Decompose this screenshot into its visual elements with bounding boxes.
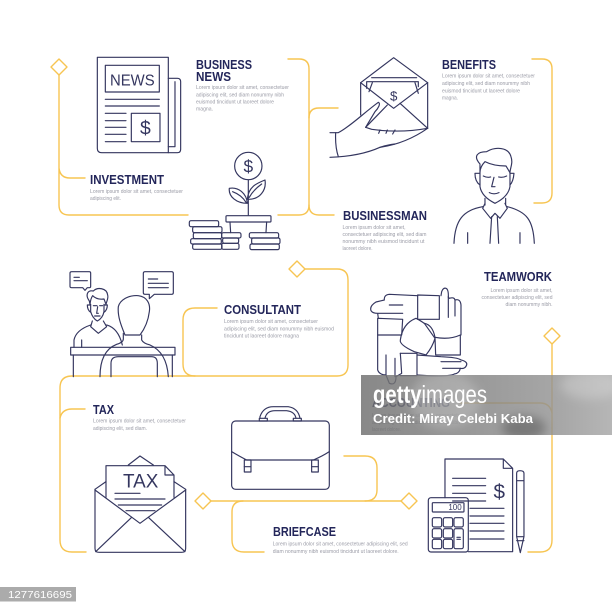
heading and text: benefits (442, 58, 535, 101)
heading and text: teamwork: consectetuer adipiscing elit, sed (482, 295, 552, 301)
icon: newspaper (97, 57, 181, 153)
heading and text: businessman: consectetuer adipiscing elit, sed diam (342, 232, 427, 238)
icon: hand holding envelope with money: $ (390, 89, 398, 104)
image id tag (0, 587, 76, 602)
heading and text: teamwork: TEAMWORK (484, 270, 552, 284)
heading and text: accounting: laoreet dolore. (372, 427, 401, 433)
heading and text: business news (196, 58, 289, 113)
heading and text: investment: INVESTMENT (90, 173, 164, 187)
icon: consultant meeting at desk (70, 272, 175, 377)
heading and text: briefcase: diam nonummy nibh euismod tincidunt ut laoreet dolore. (273, 549, 399, 555)
icon: newspaper: $ (140, 118, 151, 139)
heading and text: accounting (372, 396, 465, 433)
heading and text: investment (90, 173, 183, 202)
heading and text: consultant: CONSULTANT (224, 303, 301, 317)
icon: hand holding envelope with money (330, 58, 428, 157)
heading and text: benefits: euismod tincidunt ut laoreet dolore (442, 88, 520, 94)
icon: briefcase (232, 407, 329, 489)
heading and text: accounting: ACCOUNTING (372, 396, 450, 410)
heading and text: consultant (224, 303, 334, 339)
icon: tax envelope (95, 456, 186, 552)
heading and text: accounting: adipiscing elit, sed diam nonummy nibh (372, 420, 460, 426)
heading and text: teamwork (482, 270, 553, 308)
heading and text: investment: adipiscing elit. (90, 196, 121, 202)
icon: calculator, document and pencil: 100 (448, 503, 462, 512)
heading and text: tax: adipiscing elit, sed diam. (93, 426, 147, 432)
heading and text: tax: TAX (93, 403, 115, 417)
heading and text: accounting: Lorem ipsum dolor sit amet, consectetuer (372, 413, 465, 419)
heading and text: consultant: adipiscing elit, sed diam nonummy nibh euismod (224, 326, 334, 332)
icon: four hands teamwork (371, 288, 467, 384)
heading and text: tax (93, 403, 186, 432)
connector lines and diamonds (51, 59, 560, 552)
heading and text: investment: Lorem ipsum dolor sit amet, consectetuer (90, 189, 183, 195)
heading and text: businessman (342, 209, 427, 252)
heading and text: consultant: tincidunt ut laoreet dolore magna (224, 333, 300, 339)
heading and text: businessman: nonummy nibh euismod tincidunt ut (342, 239, 425, 245)
icon: tax envelope: TAX (123, 471, 158, 492)
icon: businessman (454, 148, 534, 243)
watermark band (361, 375, 612, 435)
icon: newspaper: NEWS (110, 72, 155, 89)
heading and text: business news: BUSINESS (196, 58, 252, 72)
heading and text: briefcase: Lorem ipsum dolor sit amet, consectetuer adipiscing elit, sed (273, 542, 408, 548)
icon: calculator, document and pencil: $ (494, 480, 506, 503)
heading and text: businessman: laoreet dolore. (342, 246, 373, 252)
heading and text: consultant: Lorem ipsum dolor sit amet, consectetuer (224, 319, 318, 325)
heading and text: briefcase: BRIEFCASE (273, 525, 336, 539)
heading and text: businessman: Lorem ipsum dolor sit amet, (342, 225, 406, 231)
heading and text: benefits: Lorem ipsum dolor sit amet, consectetuer (442, 74, 535, 80)
heading and text: business news: adipiscing elit, sed diam nonummy nibh (196, 92, 284, 98)
heading and text: benefits: adipiscing elit, sed diam nonummy nibh (442, 81, 530, 87)
icon: plant growing from coins: $ (243, 157, 253, 177)
heading and text: businessman: BUSINESSMAN (343, 209, 427, 223)
icon: plant growing from coins (189, 152, 280, 250)
watermark credit: Credit: Miray Celebi Kaba (373, 411, 534, 426)
heading and text: tax: Lorem ipsum dolor sit amet, consectetuer (93, 419, 186, 425)
heading and text: benefits: magna. (442, 95, 458, 101)
heading and text: teamwork: Lorem ipsum dolor sit amet, (490, 288, 553, 294)
heading and text: business news: Lorem ipsum dolor sit amet, consectetuer (196, 85, 289, 91)
icon: calculator, document and pencil (428, 459, 524, 553)
heading and text: business news: euismod tincidunt ut laoreet dolore (196, 100, 274, 106)
heading and text: business news: NEWS (196, 70, 231, 84)
image id tag: 1277616695 (8, 590, 72, 601)
watermark wordmark: gettyimages (373, 381, 487, 409)
heading and text: briefcase (273, 525, 408, 555)
heading and text: benefits: BENEFITS (442, 58, 496, 72)
heading and text: teamwork: diam nonummy nibh. (506, 302, 553, 308)
heading and text: business news: magna. (196, 107, 213, 113)
